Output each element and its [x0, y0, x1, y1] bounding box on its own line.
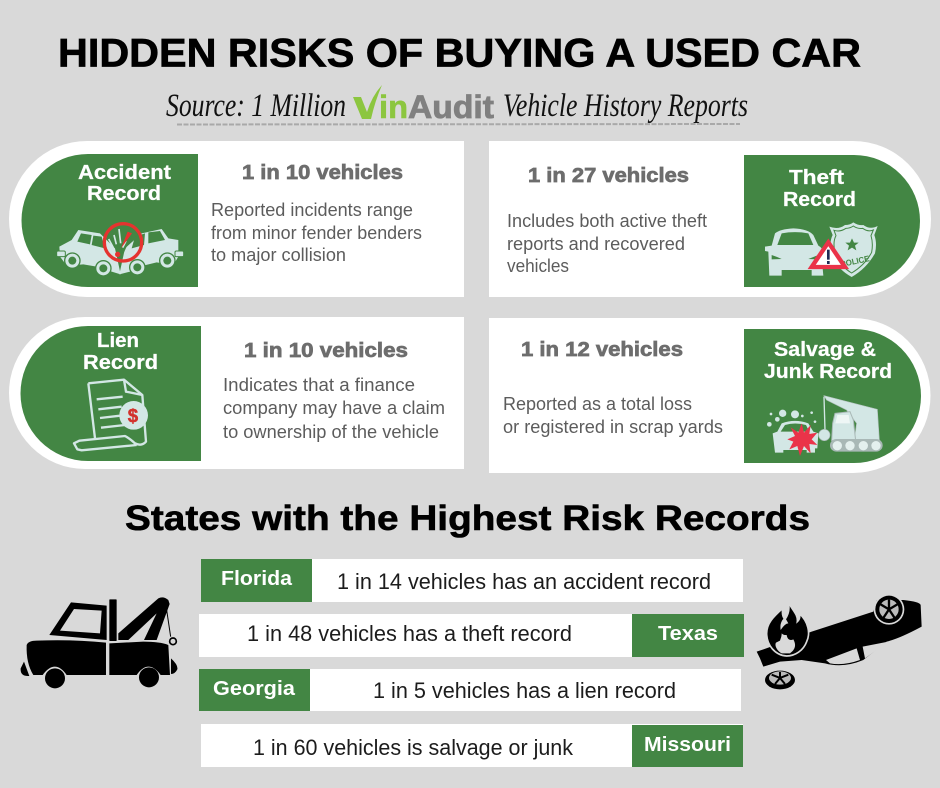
icon: wrecking crane and car — [767, 396, 883, 456]
heading: lien record: Lien — [97, 330, 139, 352]
heading: lien record: Record — [83, 352, 158, 374]
panel: florida: Florida — [221, 568, 293, 590]
panel: georgia: Georgia — [213, 678, 296, 700]
text: salvage description — [503, 394, 723, 437]
source line with VinAudit logo: Vehicle History Reports — [503, 88, 748, 124]
panel: florida — [201, 559, 743, 602]
text: theft description: Includes both active theft — [507, 211, 707, 231]
source line with VinAudit logo — [166, 85, 748, 125]
logo: VinAudit: Audit — [408, 89, 494, 125]
icon: tow truck — [21, 597, 177, 688]
icon: car collision — [57, 224, 184, 276]
text: lien description: Indicates that a finance — [223, 375, 415, 395]
text: theft description: reports and recovered — [507, 234, 685, 254]
text: accident description: to major collision — [211, 245, 346, 265]
heading: accident record: Accident — [78, 162, 171, 184]
logo: VinAudit: in — [379, 89, 408, 125]
panel: florida: 1 in 14 vehicles has an accident record — [337, 569, 711, 594]
panel: lien record — [9, 317, 464, 469]
stat: 1 in 10: 1 in 10 vehicles — [242, 162, 403, 184]
panel: salvage and junk record — [489, 318, 930, 473]
text: accident description: Reported incidents range — [211, 200, 413, 220]
heading: accident record: Record — [87, 183, 161, 205]
panel: missouri: Missouri — [644, 734, 731, 756]
heading: salvage and junk record: Salvage & — [774, 339, 876, 361]
panel: accident record — [9, 141, 464, 297]
icon: car, police badge, warning: POLICE — [840, 253, 871, 269]
panel: theft record — [489, 141, 931, 297]
panel: texas: Texas — [658, 623, 718, 645]
stat: 1 in 10: 1 in 10 vehicles — [244, 340, 408, 362]
panel: georgia — [199, 669, 741, 711]
icon: lien document — [74, 380, 148, 450]
text: salvage description: or registered in scrap yards — [503, 417, 723, 437]
heading: salvage and junk record: Junk Record — [764, 361, 892, 383]
stat: 1 in 27: 1 in 27 vehicles — [528, 165, 689, 187]
panel: georgia: 1 in 5 vehicles has a lien record — [373, 678, 676, 703]
panel: missouri: 1 in 60 vehicles is salvage or junk — [253, 735, 574, 760]
heading: accident record — [78, 162, 171, 205]
panel: missouri — [201, 724, 743, 767]
logo: VinAudit — [353, 85, 494, 125]
heading: theft record: Record — [783, 189, 856, 211]
icon: lien document: $ — [128, 405, 139, 426]
title: HIDDEN RISKS OF BUYING A USED CAR — [58, 32, 861, 76]
icon: overturned burning car — [757, 594, 922, 689]
icon: car, police badge, warning — [765, 222, 878, 277]
heading: theft record — [783, 167, 856, 211]
source line with VinAudit logo: Source: 1 Million — [166, 88, 346, 124]
text: theft description — [507, 211, 707, 276]
heading: theft record: Theft — [789, 167, 844, 189]
text: lien description: company may have a claim — [223, 398, 445, 418]
text: theft description: vehicles — [507, 256, 569, 276]
heading: salvage and junk record — [764, 339, 892, 383]
heading: states with the highest risk records: States with the Highest Risk Records — [125, 499, 810, 538]
heading: lien record — [83, 330, 158, 374]
text: lien description: to ownership of the vehicle — [223, 422, 439, 442]
stat: 1 in 12: 1 in 12 vehicles — [521, 339, 683, 361]
text: accident description — [211, 200, 422, 265]
text: lien description — [223, 375, 445, 442]
panel: texas — [199, 614, 744, 657]
text: accident description: from minor fender benders — [211, 223, 422, 243]
text: salvage description: Reported as a total loss — [503, 394, 692, 414]
panel: texas: 1 in 48 vehicles has a theft record — [247, 621, 572, 646]
